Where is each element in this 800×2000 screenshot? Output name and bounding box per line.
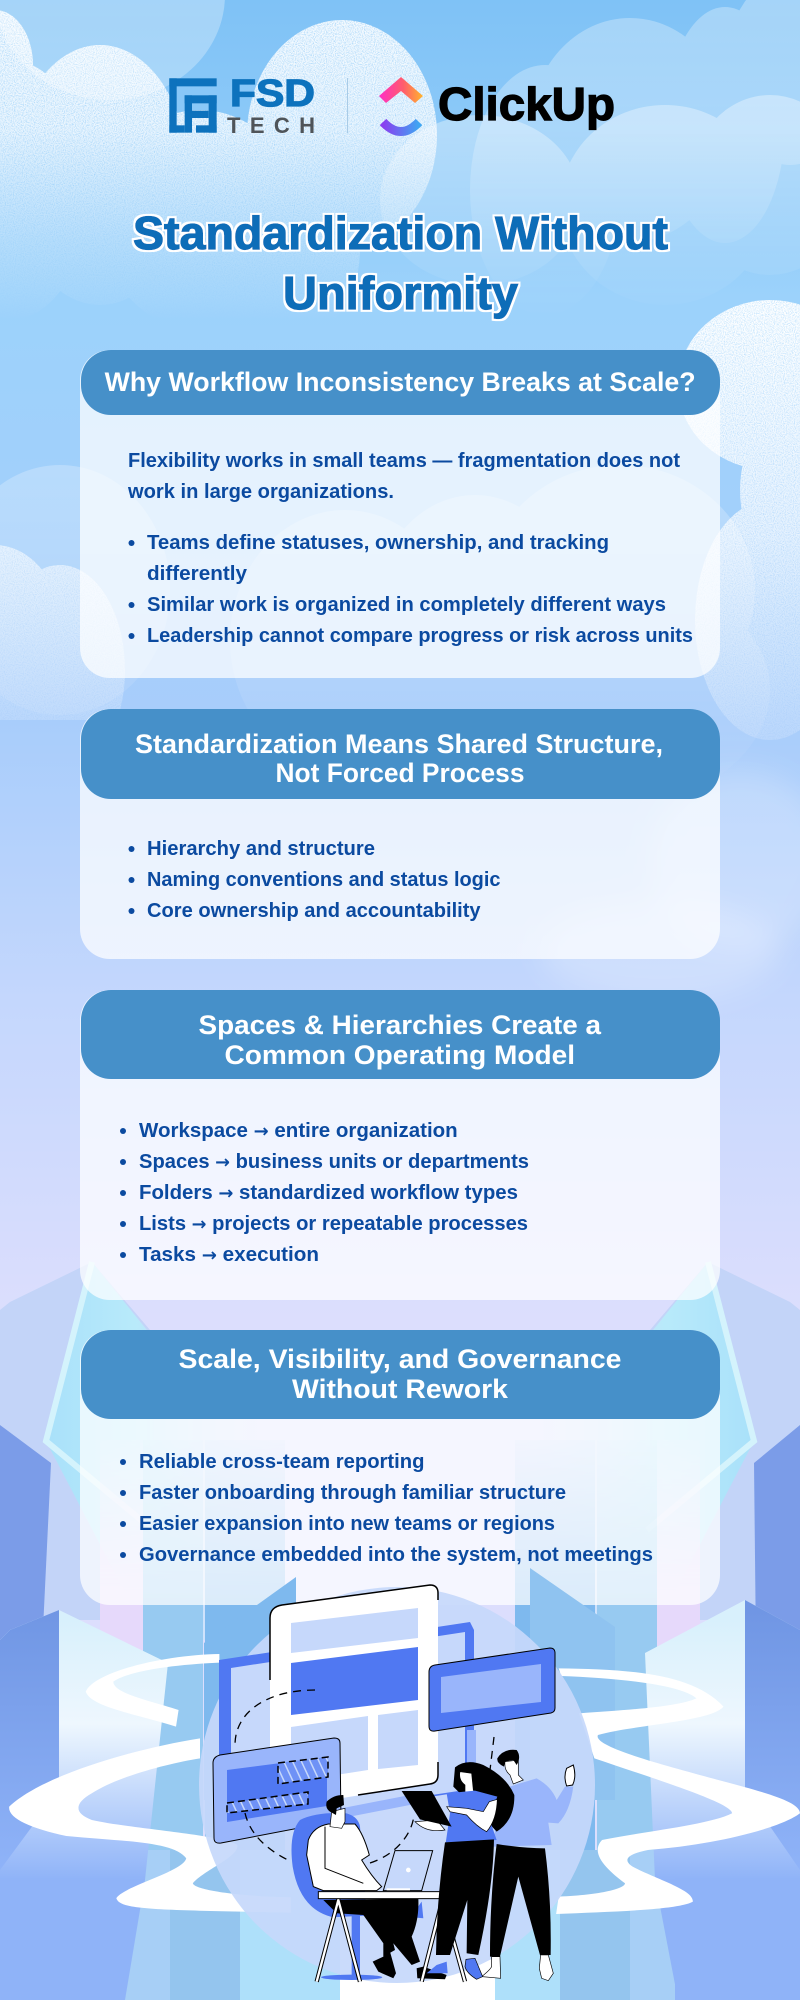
bullet list: Tasks → execution — [139, 1243, 319, 1266]
bullet list: Hierarchy and structure — [147, 837, 375, 860]
background: hazy clouds at mid height — [540, 770, 800, 1000]
heading: Common Operating Model — [224, 1040, 575, 1070]
illustration: back monitor — [219, 1622, 476, 1830]
panel: spaces and hierarchies — [80, 990, 720, 1300]
logo: FSD Tech — [169, 73, 315, 138]
heading: Without Rework — [292, 1374, 508, 1404]
FSD wordmark: FSD — [230, 73, 315, 115]
desk — [317, 1892, 465, 1982]
title: Uniformity — [283, 267, 518, 319]
seated man — [307, 1795, 447, 1979]
heading: Spaces & Hierarchies Create a — [198, 1010, 601, 1040]
background: cyan frames — [46, 1262, 754, 1640]
bullet list — [120, 1450, 653, 1566]
bullet list: Similar work is organized in completely different ways — [147, 593, 666, 616]
bullet list: Spaces → business units or departments — [139, 1150, 529, 1173]
background: right buildings — [645, 1425, 800, 2000]
background: right top clouds — [380, 95, 800, 267]
bullet list — [120, 1119, 529, 1266]
illustration: dashed arcs — [235, 1690, 494, 1863]
background: grainy cloud left — [0, 545, 125, 720]
ClickUp wordmark: ClickUp — [438, 78, 615, 130]
bullet list: Leadership cannot compare progress or risk across units — [147, 624, 693, 647]
illustration: white swirl ribbons — [9, 1654, 800, 1914]
woman with tablet — [402, 1762, 514, 1979]
bullet list: Easier expansion into new teams or regions — [139, 1512, 555, 1535]
logo divider — [347, 78, 348, 133]
heading — [81, 990, 720, 1079]
heading — [81, 350, 720, 415]
illustration: left card — [213, 1738, 341, 1843]
bullet list: Faster onboarding through familiar structure — [139, 1481, 566, 1504]
intro text: work in large organizations. — [127, 480, 394, 503]
bullet list: Workspace → entire organization — [139, 1119, 458, 1142]
illustration: right tablet — [429, 1648, 555, 1731]
illustration: rear towers — [204, 1568, 615, 1800]
intro text: Flexibility works in small teams — fragmentation does not — [128, 449, 680, 472]
TECH wordmark: TECH — [227, 113, 315, 138]
background: pale clouds behind first panel — [0, 465, 764, 691]
title — [133, 207, 668, 319]
man standing — [482, 1750, 575, 1981]
background: far buildings — [0, 1262, 800, 1620]
panel: scale, visibility, governance — [80, 1330, 720, 1605]
bullet list: differently — [147, 562, 248, 585]
bullet list: Governance embedded into the system, not meetings — [139, 1543, 653, 1566]
icon: ClickUp mark — [379, 77, 423, 132]
bullet list: Lists → projects or repeatable processes — [139, 1212, 528, 1235]
laptop — [383, 1851, 433, 1891]
background: grainy cloud right — [678, 300, 800, 740]
illustration: main page card — [270, 1585, 438, 1808]
heading — [81, 709, 720, 799]
bullet list — [128, 531, 693, 647]
panel: shared structure — [80, 709, 720, 959]
background: grainy top clouds — [0, 10, 437, 298]
intro text — [127, 449, 680, 503]
bullet list: Naming conventions and status logic — [147, 868, 500, 891]
bullet list: Folders → standardized workflow types — [139, 1181, 518, 1204]
panel: why workflow inconsistency breaks — [80, 350, 720, 678]
heading: Standardization Means Shared Structure, — [135, 729, 663, 759]
illustration: central bubble — [199, 1587, 595, 1983]
illustration: people at desk — [291, 1750, 575, 1982]
title: Standardization Without — [133, 207, 668, 259]
background: left buildings — [0, 1425, 168, 2000]
chair — [291, 1813, 423, 1980]
icon: FSD mark — [169, 78, 217, 133]
bullet list — [128, 837, 500, 922]
logo: ClickUp — [379, 77, 615, 132]
bullet list: Core ownership and accountability — [147, 899, 481, 922]
bullet list: Teams define statuses, ownership, and tracking — [147, 531, 609, 554]
heading: Not Forced Process — [276, 758, 524, 788]
heading: Why Workflow Inconsistency Breaks at Scale? — [105, 367, 696, 397]
heading: Scale, Visibility, and Governance — [178, 1344, 622, 1374]
background: pale rear clouds at top — [0, 0, 800, 252]
heading — [81, 1330, 720, 1419]
background: columns — [100, 1440, 700, 2000]
bullet list: Reliable cross-team reporting — [139, 1450, 424, 1473]
